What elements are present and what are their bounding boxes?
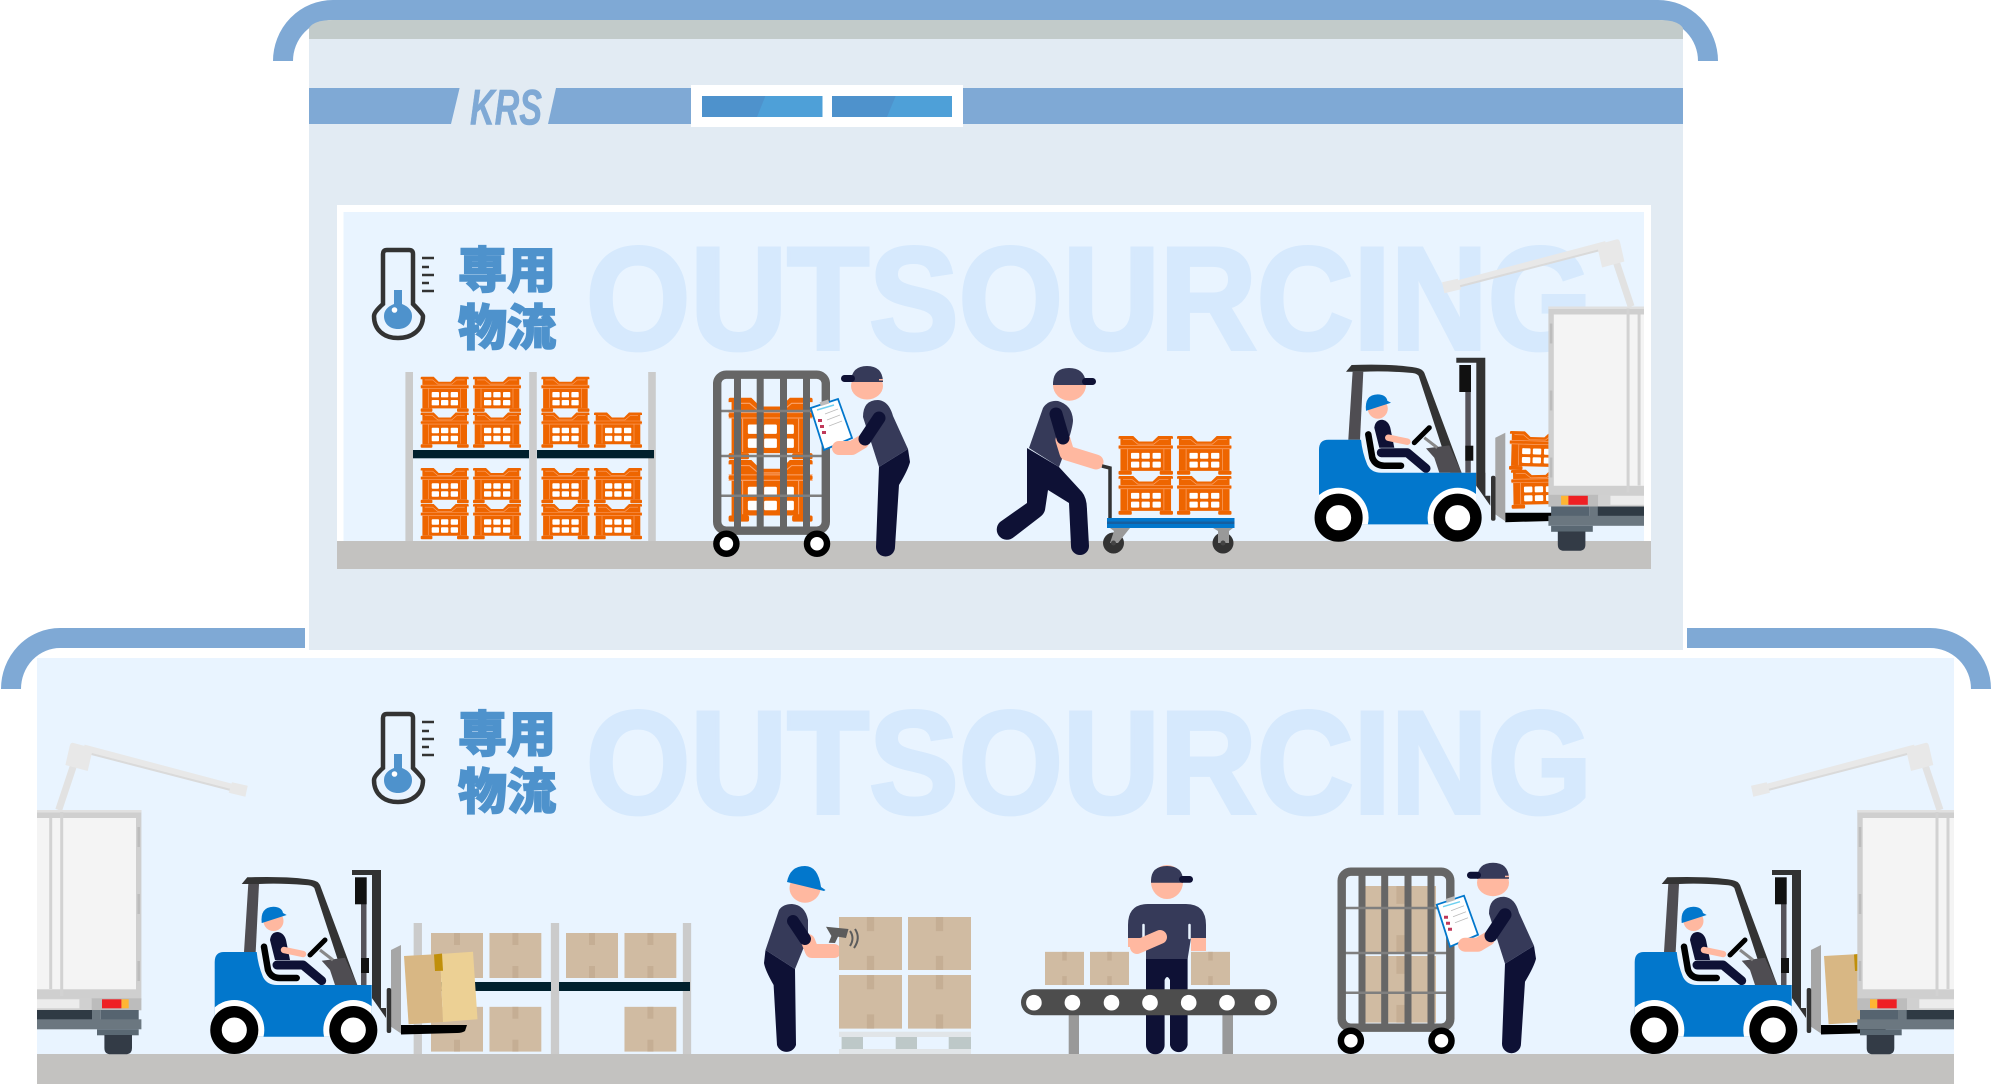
heading lower: 専用 [458, 708, 556, 762]
upper roof [283, 10, 1708, 61]
box on forklift right [1824, 954, 1863, 1024]
logo KRS: KRS [470, 80, 542, 136]
icon: thermometer lower [374, 714, 434, 802]
windows [691, 85, 963, 127]
worker with scanner [764, 866, 834, 1052]
worker pushing hand cart [997, 368, 1234, 555]
hand cart [1102, 466, 1110, 518]
panel: upper warehouse opening [337, 205, 1651, 569]
floor [37, 1054, 1954, 1084]
icon: barcode scanner [826, 927, 858, 948]
truck lower left [31, 743, 248, 1054]
worker with clipboard upper [811, 366, 910, 556]
watermark OUTSOURCING upper: OUTSOURCING [586, 217, 1592, 380]
roll cart with crates [716, 375, 827, 554]
panel: lower warehouse [37, 658, 1954, 1084]
watermark OUTSOURCING lower: OUTSOURCING [586, 681, 1592, 844]
forklift lower left [204, 870, 467, 1060]
heading lower: 物流 [458, 766, 556, 820]
eaves band [309, 20, 1683, 39]
crates on hand cart [1118, 436, 1231, 515]
conveyor belt [1021, 952, 1277, 1054]
heading upper: 専用 [458, 244, 556, 298]
lower roof left [11, 638, 305, 689]
forklift upper [1309, 358, 1571, 548]
truck upper [1442, 239, 1659, 551]
lower roof right [1687, 638, 1981, 689]
worker at conveyor [1128, 865, 1206, 1054]
company sign strip [309, 80, 1683, 136]
box on forklift left [404, 952, 478, 1024]
shelf with cardboard boxes [418, 923, 690, 1054]
forklift lower right [1624, 870, 1887, 1060]
shelf with orange crates [409, 372, 654, 541]
worker with clipboard lower [1437, 863, 1536, 1053]
floor [337, 541, 1651, 569]
icon: thermometer upper [374, 250, 434, 338]
upper building wall [309, 20, 1683, 650]
heading upper: 物流 [458, 302, 556, 356]
crates on forklift [1509, 431, 1548, 509]
truck lower right [1751, 743, 1968, 1054]
roll cart with boxes [1341, 872, 1452, 1051]
pallet of boxes [839, 917, 971, 1054]
